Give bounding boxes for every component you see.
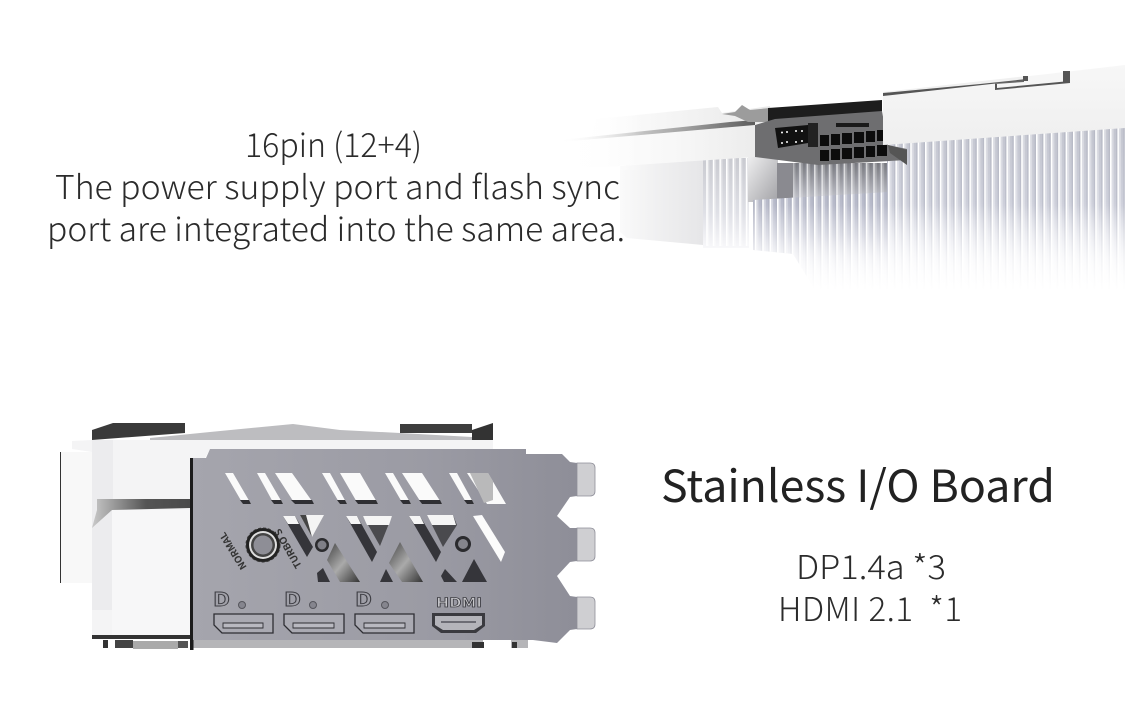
upper angled fins	[793, 163, 887, 199]
left white shroud	[570, 125, 755, 168]
heading: Stainless I/O Board	[661, 451, 1055, 515]
panel: power connector text	[47, 119, 625, 251]
text: line one: 16pin (12+4)	[245, 119, 422, 167]
panel: I/O board graphics card photo	[60, 423, 595, 650]
dark recess	[768, 100, 882, 122]
panel: I/O specification text	[661, 451, 1055, 631]
text: line three: port are integrated into the same area.	[47, 203, 625, 251]
dark pillars	[777, 163, 793, 201]
shroud top slit	[883, 71, 1070, 96]
left photo fade	[555, 100, 645, 170]
DisplayPort 3 logo: D	[355, 585, 372, 612]
bracket tabs	[577, 463, 595, 629]
spec: HDMI: HDMI 2.1 *1	[778, 583, 962, 631]
DisplayPort port slots	[223, 623, 405, 628]
spec: DisplayPort: DP1.4a *3	[796, 541, 946, 589]
left white shroud	[60, 440, 493, 635]
X-shaped vent cutouts	[283, 515, 505, 582]
top row slots	[225, 473, 506, 504]
icon: 12-pin power port	[820, 123, 887, 161]
HDMI logo: HDMI	[436, 592, 482, 611]
screw bump	[722, 105, 770, 122]
connector shadow	[888, 145, 907, 165]
soft grey side area	[620, 160, 703, 245]
panel: power connector photo	[555, 65, 1125, 300]
right white shroud	[883, 65, 1125, 145]
text: line two: The power supply port and flash sync	[55, 161, 620, 209]
connector housing	[755, 111, 907, 165]
fin fade to white	[753, 205, 1125, 300]
left top rim	[590, 106, 772, 140]
dark bracket edge	[190, 458, 194, 650]
DisplayPort 2 logo: D	[284, 585, 301, 612]
icon: 6-pin sync port	[775, 123, 818, 148]
switch label: NORMAL: NORMAL	[215, 529, 250, 573]
heatsink fins left	[703, 158, 749, 248]
heatsink fins right	[887, 125, 1125, 295]
DisplayPort 1 logo: D	[213, 585, 230, 612]
lower angled fins	[753, 192, 887, 298]
bottom edge	[92, 635, 528, 650]
grey column	[748, 157, 778, 202]
left rim dark line	[560, 120, 755, 142]
DisplayPort ports	[214, 614, 414, 633]
HDMI port	[432, 613, 485, 633]
dark side strip	[92, 499, 190, 528]
stainless I/O bracket plate	[193, 449, 577, 643]
top shroud edge	[92, 423, 493, 442]
switch label: TURBO: TURBO S	[270, 526, 305, 572]
icon: BIOS switch knob	[246, 528, 280, 562]
icon: screws	[238, 536, 471, 608]
